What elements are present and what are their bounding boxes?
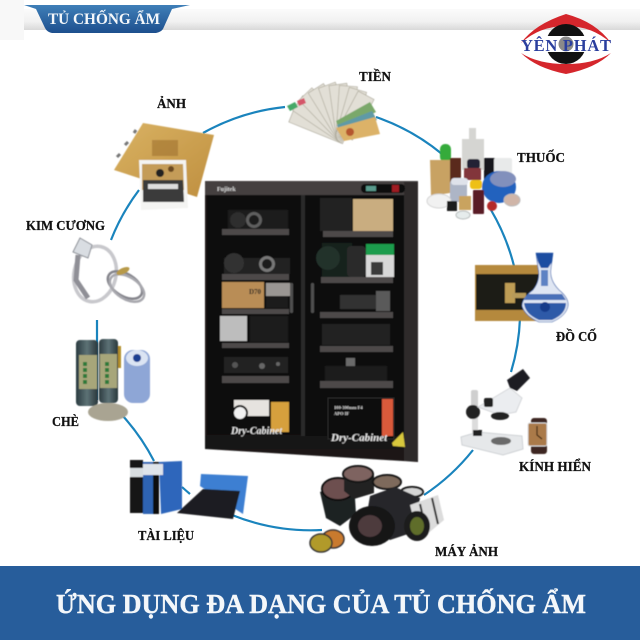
- icon: cameras and lenses: [310, 466, 444, 552]
- label: CHÈ: CHÈ: [52, 413, 79, 430]
- icon: medicine bottles: [427, 128, 520, 219]
- handles: [290, 283, 314, 313]
- logo: Yên Phát: YÊN PHÁT: [521, 36, 611, 55]
- label: THUỐC: THUỐC: [517, 148, 565, 166]
- cameras and boxes, right door: APO IF: [334, 411, 349, 416]
- label: ĐỒ CỐ: ĐỒ CỐ: [556, 327, 597, 345]
- cabinet display panel: [361, 184, 405, 193]
- footer banner: [0, 566, 640, 640]
- label: ẢNH: ẢNH: [157, 95, 186, 112]
- icon: diamond rings: [69, 238, 149, 307]
- footer title: ỨNG DỤNG ĐA DẠNG CỦA TỦ CHỐNG ẨM: [56, 588, 586, 619]
- logo: Yên Phát: [521, 14, 611, 74]
- label: TÀI LIỆU: TÀI LIỆU: [138, 527, 194, 544]
- label: KÍNH HIỂN: KÍNH HIỂN: [519, 457, 591, 475]
- icon: binders and folders: [130, 460, 248, 519]
- cabinet brand: Dry-Cabinet: [330, 432, 388, 444]
- icon: antique book and vase: [475, 253, 568, 322]
- header ribbon: TỦ CHỐNG ẨM: TỦ CHỐNG ẨM: [48, 10, 160, 28]
- cabinet brand: Fujitek: [217, 187, 236, 193]
- header ribbon: TỦ CHỐNG ẨM: [24, 5, 190, 33]
- label: TIỀN: TIỀN: [359, 68, 391, 85]
- label: MÁY ẢNH: MÁY ẢNH: [435, 543, 498, 560]
- cabinet brand: [217, 187, 388, 444]
- icon: photo album: [114, 123, 214, 210]
- icon: microscope: [461, 369, 530, 455]
- shelves: [222, 229, 393, 388]
- label: KIM CƯƠNG: KIM CƯƠNG: [26, 219, 105, 234]
- cameras on shelves, left door: [220, 210, 290, 432]
- icon: tea cans: [76, 339, 150, 421]
- icon: wristwatch: [528, 418, 547, 454]
- header band: [0, 0, 640, 40]
- connecting blue circle: [97, 107, 520, 530]
- icon: banknotes: [287, 82, 380, 144]
- cabinet brand: Dry-Cabinet: [230, 426, 283, 437]
- dry cabinet: [205, 181, 418, 462]
- cameras and boxes, right door: 100-300mm F4: [334, 405, 363, 410]
- cameras on shelves, left door: D70: [249, 288, 262, 296]
- cameras and boxes, right door: [316, 198, 405, 447]
